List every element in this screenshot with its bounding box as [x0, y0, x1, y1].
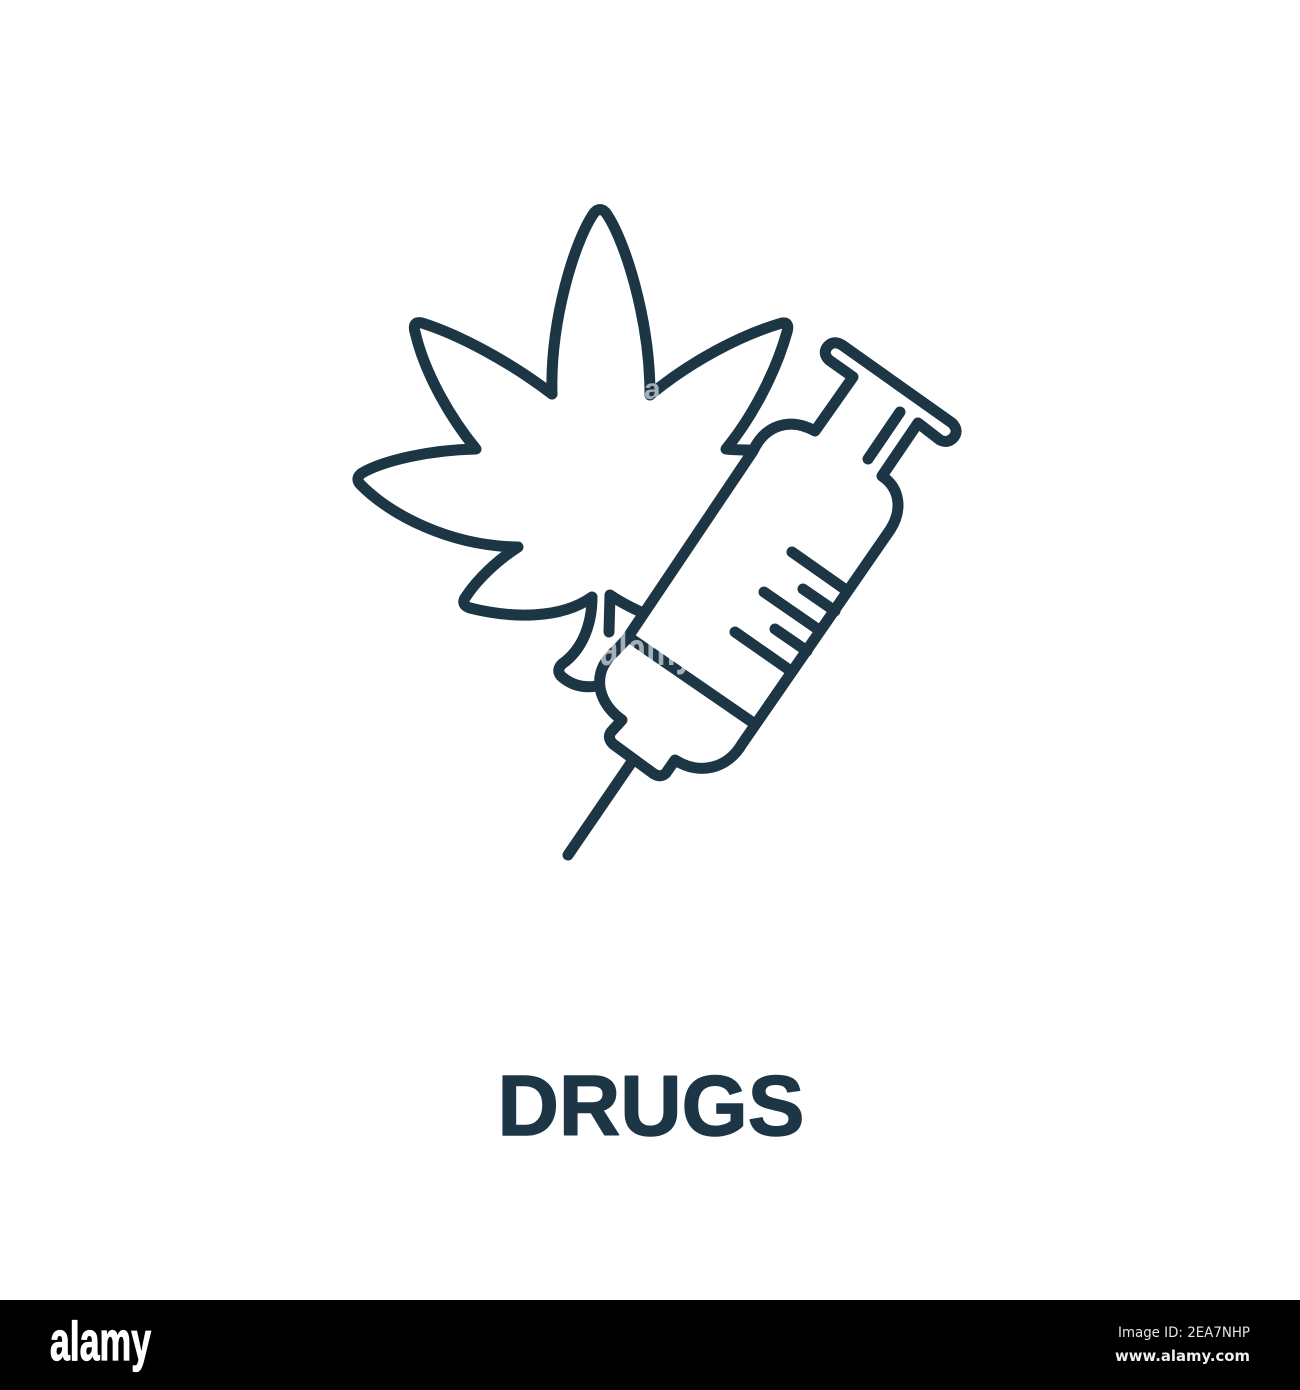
footer logo: alamy: alamy	[50, 1310, 151, 1372]
syringe measurement ticks	[735, 552, 846, 669]
syringe plunger seal line	[630, 638, 752, 722]
icon: cannabis leaf	[358, 210, 788, 687]
title: DRUGS	[498, 1059, 804, 1154]
footer website: www.alamy.com	[1115, 1347, 1250, 1365]
icon: syringe	[568, 343, 956, 855]
watermark: faint alamy on icon: a	[644, 373, 661, 406]
syringe inner plunger line	[868, 412, 900, 459]
watermark: faint alamy on icon	[600, 373, 694, 675]
footer bar	[0, 1300, 1300, 1390]
watermark: faint alamy on icon: alamy	[600, 623, 694, 675]
syringe barrel and plunger outline	[600, 343, 956, 776]
syringe needle	[568, 763, 631, 855]
footer image id: Image ID: 2EA7NHP	[1118, 1325, 1250, 1341]
